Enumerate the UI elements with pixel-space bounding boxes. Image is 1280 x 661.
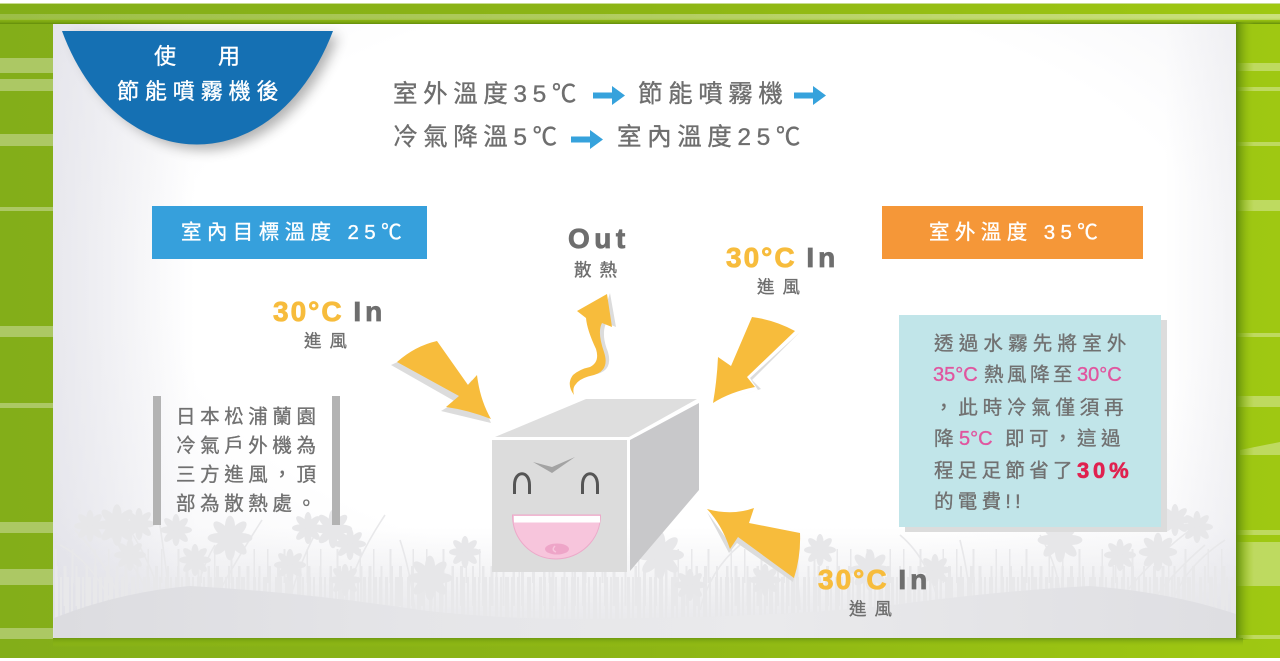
label: indoor target temperature xyxy=(152,206,427,259)
callout: savings explanation: 程足足節省了 xyxy=(934,460,1077,482)
label: 30°C In left: 30°C In xyxy=(273,296,386,327)
text block: intake note with side bars: 冷氣戶外機為 xyxy=(176,435,321,457)
mouth xyxy=(512,515,600,559)
label: indoor target temperature: 室內目標溫度 25℃ xyxy=(181,221,407,244)
badge: 使用節能噴霧機後: 使 xyxy=(154,44,176,69)
label: outdoor temperature: 室外溫度 35℃ xyxy=(929,221,1103,244)
text block: intake note with side bars: 日本松浦蘭園 xyxy=(176,406,321,428)
formula text with arrows: 節能噴霧機 xyxy=(638,80,788,108)
label: Out exhaust xyxy=(568,223,630,280)
callout: savings explanation: 5°C xyxy=(959,428,993,450)
label: 30°C In bottom right: 進風 xyxy=(849,599,900,619)
meadow silhouette xyxy=(55,504,1225,618)
formula text with arrows xyxy=(393,80,826,150)
label: 30°C In top right: 進風 xyxy=(757,277,808,297)
formula text with arrows: 室內溫度25℃ xyxy=(617,124,806,150)
callout: savings explanation: 即可，這過 xyxy=(1005,428,1125,450)
formula text with arrows: 冷氣降溫5℃ xyxy=(393,124,563,150)
text block: intake note with side bars xyxy=(153,396,340,525)
label: 30°C In top right: 30°C In xyxy=(726,242,839,273)
badge: 使用節能噴霧機後: 用 xyxy=(218,44,240,69)
label: 30°C In bottom right: 30°C In xyxy=(818,564,931,595)
callout: savings explanation xyxy=(899,315,1167,532)
callout: savings explanation: 透過水霧先將室外 xyxy=(934,333,1132,355)
arrow: to indoor xyxy=(571,130,603,149)
callout: savings explanation: 30% xyxy=(1077,458,1132,483)
arrow: to cooling xyxy=(794,86,826,105)
badge: 使用節能噴霧機後: 節能噴霧機後 xyxy=(117,79,284,104)
arrow: to sprayer xyxy=(593,86,625,105)
formula text with arrows: 室外溫度35℃ xyxy=(393,80,582,108)
text block: intake note with side bars: 部為散熱處。 xyxy=(176,493,321,515)
label: 30°C In bottom right xyxy=(818,564,931,619)
callout: savings explanation: 30°C xyxy=(1077,364,1122,386)
callout: savings explanation: 的電費!! xyxy=(934,491,1025,513)
label: outdoor temperature xyxy=(882,206,1143,259)
label: 30°C In left: 進風 xyxy=(304,331,355,351)
badge: 使用節能噴霧機後 xyxy=(62,28,342,157)
eyes xyxy=(514,474,598,494)
callout: savings explanation: 35°C xyxy=(933,364,978,386)
brow xyxy=(533,457,575,473)
label: 30°C In left xyxy=(273,296,386,351)
label: 30°C In top right xyxy=(726,242,839,297)
callout: savings explanation: 降 xyxy=(934,428,959,450)
callout: savings explanation: 熱風降至 xyxy=(984,364,1076,386)
text block: intake note with side bars: 三方進風，頂 xyxy=(176,464,321,486)
label: Out exhaust: 散熱 xyxy=(574,260,625,280)
label: Out exhaust: Out xyxy=(568,223,630,254)
callout: savings explanation: ，此時冷氣僅須再 xyxy=(934,397,1128,419)
